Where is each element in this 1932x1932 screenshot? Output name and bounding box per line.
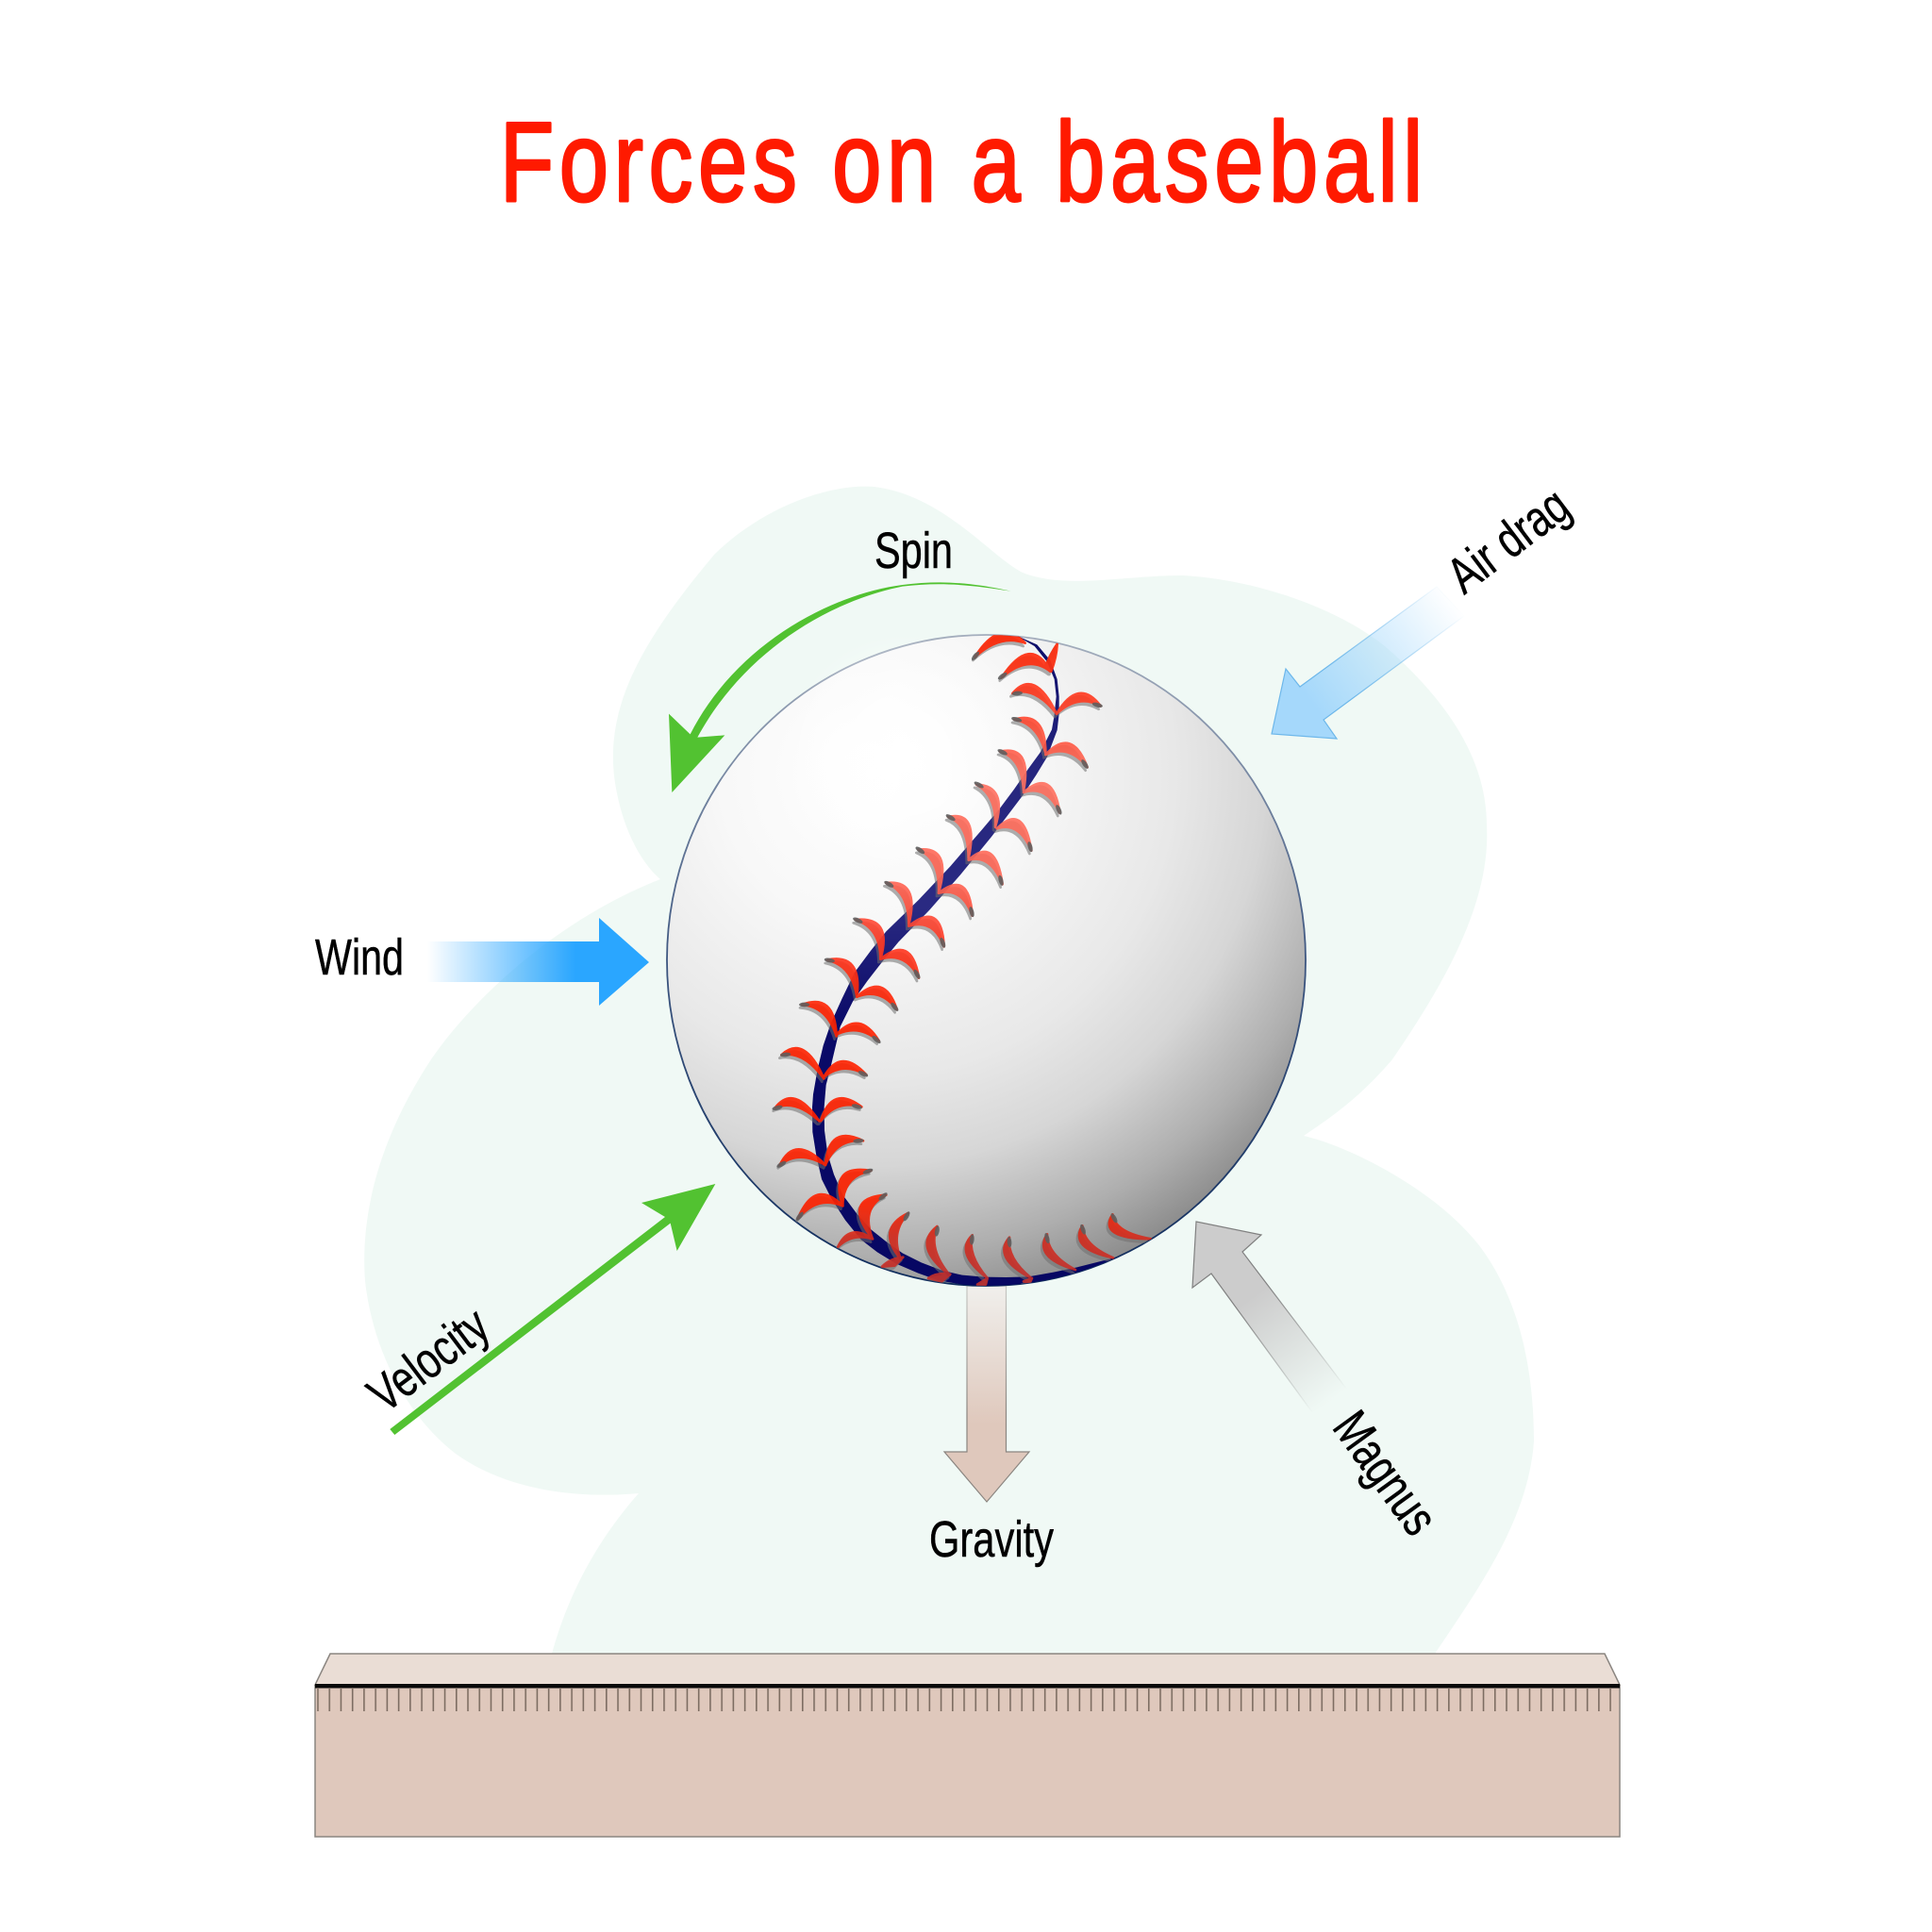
ball body	[667, 635, 1306, 1286]
seam	[812, 635, 1120, 1286]
seam and stitches	[772, 633, 1151, 1288]
label: Gravity: Gravity	[929, 1511, 1054, 1568]
gravity arrow	[944, 1286, 1029, 1502]
background blob	[364, 487, 1534, 1654]
ground block	[315, 1654, 1620, 1837]
label: Air drag: Air drag	[1437, 476, 1580, 605]
label: Spin: Spin	[874, 523, 953, 579]
ground top face	[315, 1654, 1620, 1685]
ground front face	[315, 1686, 1620, 1837]
title: Forces on a baseball	[500, 99, 1423, 225]
velocity arrow	[390, 1184, 715, 1435]
air drag arrow	[1272, 587, 1464, 739]
ruler ticks	[317, 1688, 1611, 1711]
ground edge line	[315, 1684, 1620, 1689]
wind arrow	[427, 918, 649, 1006]
label: Velocity: Velocity	[358, 1297, 499, 1424]
stitch shadows	[774, 636, 1149, 1288]
stitch tips	[772, 650, 1119, 1248]
label: Magnus: Magnus	[1322, 1401, 1449, 1545]
magnus arrow	[1192, 1222, 1347, 1412]
ball highlight	[783, 632, 1028, 877]
red stitches	[775, 633, 1151, 1285]
spin arrow	[669, 582, 1011, 792]
label: Wind: Wind	[315, 929, 404, 986]
baseball	[667, 632, 1306, 1288]
